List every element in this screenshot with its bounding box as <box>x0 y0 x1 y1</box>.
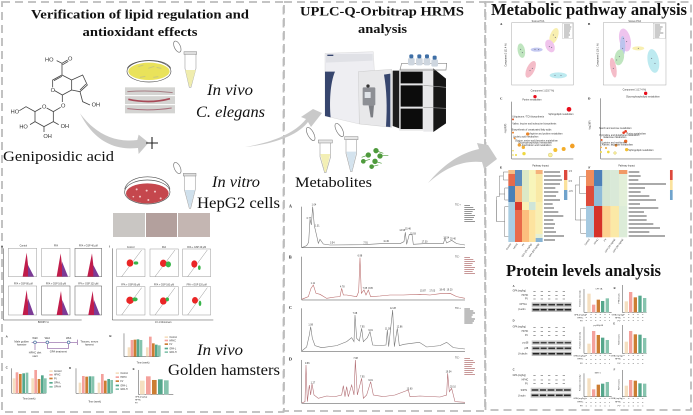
icon: plus sign <box>146 137 158 149</box>
chart: bar chart E: GPA (mg/kg) <box>135 395 147 398</box>
chart: TIC chromatogram A: TIC + <box>455 205 461 207</box>
icon: geniposidic acid molecule: OH <box>61 124 69 130</box>
icon: geniposidic acid molecule: O <box>68 57 73 63</box>
chart: TIC chromatogram C: 12.86 <box>397 327 403 329</box>
icon: geniposidic acid molecule: HO <box>11 109 20 115</box>
chart: pathway bubble plot C: Arginine and proline metabolism <box>529 133 563 136</box>
chart: TIC chromatogram D: 19.54 <box>446 371 452 373</box>
chart: bar chart B: GPA-L <box>169 347 177 350</box>
chart: protein bars middle right: SOD levels <box>618 334 620 345</box>
chart: bar chart C: Control <box>54 370 62 373</box>
heading: UPLC: UPLC-Q-Orbitrap HRMS <box>300 4 464 18</box>
chart: PCA plot B: Component 1 (17.4 %) <box>623 89 646 92</box>
image: cell micrographs <box>113 213 210 237</box>
diagram: hamster experiment timeline: Wk0 <box>32 336 38 340</box>
chart: TIC chromatogram B: 17.03 <box>429 291 436 293</box>
chart: pathway bubble plot C: Glycine, serine and threonine metabolism <box>515 139 558 142</box>
chart: pathway bubble plot D: Starch and sucrose metabolism <box>599 127 632 130</box>
chart: TIC chromatogram A: 0.77 <box>307 218 312 220</box>
chart: pathway bubble plot D: Cysteine and methionine <box>601 141 627 144</box>
chart: flow cytometry histograms: FFA + GSP 40 μM <box>79 245 98 248</box>
icon: geniposidic acid molecule: O <box>51 88 56 94</box>
chart: JC-1 scatter plots: FFA + GSP 80 μM <box>121 283 140 286</box>
diagram: hamster experiment timeline: A <box>6 335 9 339</box>
chart: western blots D: β-tubulin <box>518 353 528 356</box>
chart: flow cytometry histograms: FFA + GSP 160 μM <box>46 282 66 285</box>
chart: protein bars middle left: HFHC <box>577 358 584 360</box>
heading: verification: Verification of lipid regulation and <box>31 8 249 22</box>
diagram: hamster experiment timeline: Tissues, serum <box>80 339 99 343</box>
chart: western blots A <box>513 284 572 312</box>
chart: TIC chromatogram B <box>289 254 475 300</box>
chart: heatmap F: GPA (25 mg/kg) <box>604 238 616 253</box>
chart: bar chart E: E <box>133 367 135 371</box>
icon: geniposidic acid molecule: O <box>42 105 47 111</box>
icon: metabolite tubes <box>305 122 358 173</box>
chart: TIC chromatogram D: 0.66 <box>305 363 310 365</box>
chart: protein bars top left: HFHC <box>577 317 584 319</box>
chart: pathway bubble plot D: Galactose metabolism <box>603 136 626 139</box>
chart: pathway bubble plot C: Glycerophospholipid metabolism <box>518 142 552 145</box>
chart: PCA plot A <box>500 20 573 92</box>
chart: TIC chromatogram D: 13.60 <box>407 388 413 390</box>
chart: TIC chromatogram B: 4.78 <box>340 287 345 289</box>
icon: geniposidic acid molecule: O <box>61 103 66 109</box>
chart: pathway bubble plot D: Purine metabolism <box>627 133 646 136</box>
chart: western blots D: FV <box>525 335 528 337</box>
label: metabolites: Metabolites <box>295 175 372 191</box>
chart: PCA plot A: Component 2 (21.4 %) <box>505 43 508 67</box>
chart: PCA plot A: Scores PCA <box>532 20 545 23</box>
diagram: hamster experiment timeline: Wk4 <box>66 336 72 340</box>
chart: PCA plot A: A <box>500 22 503 26</box>
chart: pathway bubble plot C: Sphingolipid metabolism <box>548 113 574 116</box>
chart: JC-1 scatter plots: FFA + GSP 160 μM <box>154 283 174 286</box>
chart: pathway bubble plot D: Pyrimidine and glutathione metabolism <box>599 134 639 137</box>
chart: JC-1 scatter plots: FFA + GSP 40 μM <box>187 246 206 249</box>
chart: JC-1 scatter plots <box>109 245 213 324</box>
chart: protein bars bottom right: GPA (mg/kg) <box>611 397 623 400</box>
chart: protein bars bottom right: F <box>614 367 616 371</box>
heading: UPLC: analysis <box>358 22 407 36</box>
chart: protein bars top right: HFHC <box>615 317 621 319</box>
arrow: in vivo results to metabolomics <box>245 109 322 147</box>
chart: TIC chromatogram A: 3.54 <box>330 242 335 244</box>
chart: protein bars top right <box>612 285 647 322</box>
chart: heatmap E: 0.5 <box>569 181 573 183</box>
chart: JC-1 scatter plots: FFA <box>162 246 167 249</box>
chart: pathway bubble plot C: C <box>500 96 503 100</box>
heading: metabolic pathway analysis: Metabolic pathway analysis <box>491 0 687 19</box>
arrow: compound to plus <box>80 113 149 154</box>
chart: pathway bubble plot D: D <box>588 96 591 100</box>
panel: UPLC-Q-Orbitrap HRMS analysis <box>289 4 475 403</box>
chart: TIC chromatogram C: 7.95 <box>360 327 365 329</box>
chart: heatmap E: 1.5 <box>569 171 573 173</box>
chart: TIC chromatogram B: 15.87 <box>420 291 427 293</box>
chart: PCA plot B: Component 2 (16.1 %) <box>596 43 599 67</box>
diagram: hamster experiment timeline: start <box>32 354 38 358</box>
diagram: hamster experiment timeline: HFHC diet <box>29 351 41 355</box>
chart: bar chart B: FV <box>169 344 173 346</box>
icon: yellow petri dish <box>127 60 171 82</box>
chart: pathway bubble plot D <box>588 92 662 168</box>
chart: TIC chromatogram A: 15.46 <box>405 229 412 231</box>
label: geniposidic acid: Geniposidic acid <box>3 149 115 165</box>
chart: TIC chromatogram C: C <box>289 305 292 310</box>
chart: western blots A: GPA (mg/kg) <box>513 290 526 293</box>
chart: TIC chromatogram A: 20.40 <box>450 239 457 241</box>
chart: protein bars bottom left <box>573 372 612 407</box>
chart: pathway bubble plot D: Alanine, aspartate metabolism <box>602 144 633 147</box>
chart: bar chart E <box>133 367 173 404</box>
chart: TIC chromatogram A <box>289 203 475 248</box>
chart: bar chart C: GPA-H <box>54 386 62 389</box>
chart: pathway bubble plot C: Purine metabolism <box>522 98 542 101</box>
chart: TIC chromatogram B: B <box>289 254 292 259</box>
chart: western blots D: p-p38 <box>522 343 529 345</box>
panel: verification of lipid regulation <box>1 8 280 404</box>
chart: heatmap E: -0.5 <box>569 191 573 193</box>
chart: protein bars bottom left: GPA (mg/kg) <box>573 397 586 400</box>
chart: TIC chromatogram B: 6.98 <box>358 256 363 258</box>
chart: protein bars top right: FV <box>618 320 621 322</box>
chart: western blots D: HFHC <box>522 331 528 333</box>
chart: bar chart B: Control <box>169 336 177 339</box>
chart: protein bars top left <box>574 287 612 322</box>
chart: heatmap F: HFHC <box>594 238 600 245</box>
chart: JC-1 scatter plots: I <box>109 245 110 249</box>
chart: bar chart D: GPA-H <box>120 388 128 391</box>
chart: bar chart D: HFHC <box>120 377 127 379</box>
chart: TIC chromatogram B: 1.11 <box>311 283 316 285</box>
chart: protein bars bottom right: HFHC <box>615 402 621 404</box>
chart: bar chart C: GPA-L <box>54 382 62 385</box>
chart: protein bars top right: B <box>614 286 616 290</box>
chart: heatmap F: FV <box>604 238 608 242</box>
diagram: hamster experiment timeline <box>6 335 99 358</box>
chart: TIC chromatogram A: 7.91 <box>363 242 369 244</box>
chart: western blots D <box>513 319 572 356</box>
chart: protein bars middle left: p-p38/p38 <box>593 325 604 327</box>
chart: protein bars middle right: E <box>613 321 615 325</box>
chart: JC-1 scatter plots: JC-1 Monomers <box>155 321 172 324</box>
diagram: hamster experiment timeline: hamster <box>17 343 27 347</box>
chart: heatmap F <box>575 166 673 253</box>
chart: pathway bubble plot C: Arachidonic acid metabolism <box>522 144 551 147</box>
chart: protein bars bottom right <box>611 367 647 407</box>
chart: heatmap F: Control <box>584 238 591 246</box>
chart: TIC chromatogram A: A <box>289 203 292 208</box>
chart: TIC chromatogram A: 17.30 <box>422 242 428 244</box>
icon: blue tube <box>172 161 196 208</box>
chart: TIC chromatogram C: TIC + <box>455 308 461 310</box>
chart: bar chart C: HFHC <box>54 375 61 377</box>
panel: metabolic pathway and protein analysis <box>491 0 687 407</box>
chart: western blots C: GPA (mg/kg) <box>513 374 526 377</box>
chart: pathway bubble plot D: Pathway Impact <box>618 165 635 168</box>
heading: verification: antioxidant effects <box>82 25 198 39</box>
chart: western blots A: CPT1A <box>519 303 527 306</box>
chart: western blots A: HFHC <box>522 295 528 297</box>
chart: pathway bubble plot C: Ubiquinone / TCA biosynthesis <box>512 116 545 119</box>
chart: flow cytometry histograms: BODIPY-A <box>38 321 49 324</box>
heading: protein levels analysis: Protein levels analysis <box>506 261 661 280</box>
chart: heatmap F: F <box>588 166 590 170</box>
chart: protein bars middle left <box>573 325 612 365</box>
chart: TIC chromatogram C <box>289 305 475 352</box>
chart: western blots C: β-actin <box>518 394 526 397</box>
chart: heatmap F: GPA (50 mg/kg) <box>612 238 624 253</box>
chart: bar chart C <box>6 365 62 401</box>
icon: geniposidic acid molecule <box>11 57 100 140</box>
chart: TIC chromatogram B: 8.05 <box>368 288 374 290</box>
chart: flow cytometry histograms: H <box>1 245 3 249</box>
chart: TIC chromatogram D: 1.27 <box>311 382 316 384</box>
chart: western blots A: FV <box>525 299 528 301</box>
chart: protein bars bottom right: ROS levels <box>618 379 620 390</box>
chart: western blots D: p38 <box>524 348 529 350</box>
label: in vivo golden hamsters: In vivo <box>196 342 243 359</box>
chart: TIC chromatogram A: 14.96 <box>399 230 406 232</box>
chart: western blots C: C <box>513 367 515 371</box>
chart: pathway bubble plot D: Glycerophospholipid metabolism <box>626 96 660 99</box>
chart: pathway bubble plot C: -log10(P) <box>505 124 507 133</box>
chart: TIC chromatogram B: 19.20 <box>447 289 453 291</box>
chart: flow cytometry histograms <box>1 245 102 324</box>
chart: protein bars top left: CPT1A <box>595 287 603 290</box>
chart: TIC chromatogram A: 19.54 <box>443 237 450 239</box>
chart: western blots C <box>513 367 571 398</box>
chart: protein bars bottom left: FV <box>580 405 583 407</box>
chart: TIC chromatogram D: 7.08 <box>353 358 359 360</box>
icon: geniposidic acid molecule: OH <box>43 134 52 140</box>
chart: TIC chromatogram D: 9.01 <box>368 380 374 382</box>
chart: protein bars top left: FV <box>580 320 583 322</box>
chart: heatmap E: FV <box>522 243 526 247</box>
chart: TIC chromatogram A: 15.93 <box>410 233 417 235</box>
chart: bar chart D: FV <box>120 381 124 383</box>
chart: bar chart B: B <box>109 334 112 338</box>
chart: bar chart B: Time (week) <box>137 363 150 365</box>
chart: protein bars bottom right: FV <box>618 405 621 407</box>
chart: TIC chromatogram B: TIC - <box>455 256 460 258</box>
chart: TIC chromatogram B: 18.45 <box>439 289 446 291</box>
chart: PCA plot B <box>588 20 666 92</box>
chart: bar chart E: FV <box>135 402 138 404</box>
icon: geniposidic acid molecule: HO <box>45 57 54 63</box>
chart: TIC chromatogram C: 9.01 <box>368 330 374 332</box>
image: worm micrographs <box>125 87 175 113</box>
icon: mass spectrometer instrument <box>325 52 447 132</box>
chart: TIC chromatogram A: 1.31 <box>315 226 320 228</box>
chart: western blots A: β-actin <box>518 308 526 311</box>
chart: TIC chromatogram A: 1.04 <box>312 205 317 207</box>
chart: protein bars middle right: FV <box>618 363 621 365</box>
chart: protein bars top left: Relative intensity <box>579 289 582 307</box>
chart: bar chart C: FV <box>54 378 57 380</box>
chart: flow cytometry histograms: FFA + GSP 320 μM <box>78 282 98 285</box>
chart: TIC chromatogram C: 11.30 <box>385 328 391 330</box>
chart: bar chart D: GPA-L <box>120 384 128 387</box>
chart: protein bars middle right <box>611 321 647 365</box>
diagram: hamster experiment timeline: Male golden <box>14 339 29 343</box>
chart: TIC chromatogram D: D <box>289 357 292 362</box>
chart: TIC chromatogram D: 20.10 <box>450 387 457 389</box>
chart: pathway bubble plot C: Biosynthesis of unsaturated fatty acids <box>512 129 552 132</box>
chart: protein bars bottom left: HFHC <box>577 402 584 404</box>
chart: bar chart D: Time (week) <box>88 402 101 404</box>
chart: heatmap E <box>497 166 573 258</box>
chart: western blots D: GPA (mg/kg) <box>513 326 526 329</box>
chart: PCA plot B: B <box>588 22 591 26</box>
chart: protein bars middle left: GPA (mg/kg) <box>573 354 586 357</box>
chart: TIC chromatogram B: 7.65 <box>363 288 368 290</box>
chart: heatmap E: GPA (50 mg/kg) <box>528 243 540 258</box>
label: in vivo C. elegans: In vivo <box>206 82 253 99</box>
chart: TIC chromatogram D: 7.95 <box>360 377 365 379</box>
chart: pathway bubble plot D: -log10(P) <box>590 120 592 130</box>
chart: protein bars top right: FFA levels <box>617 293 620 303</box>
diagram: hamster experiment timeline: GPA treatment <box>50 350 67 354</box>
chart: TIC chromatogram C: 7.08 <box>353 313 358 315</box>
chart: heatmap E: HFHC <box>513 243 519 250</box>
chart: bar chart B: GPA-H <box>169 351 177 354</box>
chart: heatmap E: E <box>500 166 503 170</box>
chart: pathway bubble plot C <box>500 95 575 168</box>
chart: flow cytometry histograms: FFA + GSP 80 μM <box>14 282 33 285</box>
icon: geniposidic acid molecule: OH <box>92 103 100 109</box>
label: in vitro HepG2 cells: HepG2 cells <box>197 195 280 212</box>
chart: bar chart C: Time (week) <box>23 399 36 401</box>
chart: JC-1 scatter plots: Control <box>127 246 135 249</box>
chart: western blots C: HFHC <box>522 380 528 382</box>
chart: bar chart D <box>69 366 128 404</box>
diagram: hamster experiment timeline: harvest <box>85 343 94 347</box>
chart: TIC chromatogram A: 11.30 <box>383 241 390 243</box>
chart: flow cytometry histograms: FFA <box>54 245 59 248</box>
icon: yellow tube <box>172 40 197 87</box>
chart: protein bars middle left: FV <box>580 363 583 365</box>
chart: PCA plot B: Scores PCA <box>628 20 641 23</box>
chart: protein bars top right: GPA (mg/kg) <box>612 313 624 316</box>
chart: western blots D: D <box>513 319 515 323</box>
chart: pathway bubble plot C: Valine, leucine and isoleucine biosynthesis <box>512 122 557 125</box>
label: in vitro HepG2 cells: In vitro <box>211 174 260 191</box>
chart: TIC chromatogram C: 12.28 <box>390 308 397 310</box>
arrow: metabolomics to pathway analysis <box>428 143 497 183</box>
chart: bar chart E: HFHC <box>135 399 141 401</box>
chart: protein bars middle left: Relative intensity <box>579 331 582 348</box>
chart: heatmap E: GPA (25 mg/kg) <box>521 243 533 258</box>
label: in vivo C. elegans: C. elegans <box>196 104 265 121</box>
chart: bar chart D: D <box>69 366 72 370</box>
chart: protein bars bottom left: SIRT1 <box>595 372 602 374</box>
chart: bar chart D: Control <box>120 372 128 375</box>
chart: protein bars middle right: HFHC <box>615 359 621 361</box>
chart: western blots A: A <box>513 284 515 288</box>
chart: bar chart B <box>109 333 177 365</box>
icon: green molecules <box>361 148 388 169</box>
chart: TIC chromatogram C: 1.08 <box>308 325 314 327</box>
diagram: hamster experiment timeline: Wk2 <box>45 336 51 340</box>
chart: protein bars middle right: GPA (mg/kg) <box>611 354 623 357</box>
chart: western blots C: FV <box>525 383 528 385</box>
chart: pathway bubble plot C: Pathway Impact <box>532 165 549 168</box>
chart: bar chart B: HFHC <box>169 340 176 342</box>
chart: TIC chromatogram D: TIC - <box>455 357 460 359</box>
label: in vivo golden hamsters: Golden hamsters <box>168 362 280 379</box>
chart: protein bars top left: GPA (mg/kg) <box>574 313 586 316</box>
chart: heatmap E: Control <box>505 242 512 251</box>
chart: protein bars bottom left: Relative intensity <box>579 374 582 391</box>
icon: red petri dish <box>125 177 170 204</box>
icon: geniposidic acid molecule: HO <box>19 125 28 131</box>
chart: bar chart C: C <box>6 365 9 369</box>
chart: western blots C: SIRT1 <box>521 390 528 392</box>
chart: JC-1 scatter plots: FFA + GSP 320 μM <box>187 283 207 286</box>
chart: pathway bubble plot C: Linoleic acid metabolism <box>513 135 538 138</box>
chart: pathway bubble plot D: Sphingolipid metabolism <box>628 149 654 152</box>
chart: PCA plot A: Component 1 (33.7 %) <box>531 89 554 92</box>
chart: TIC chromatogram D <box>289 357 475 403</box>
chart: flow cytometry histograms: Control <box>20 245 28 248</box>
